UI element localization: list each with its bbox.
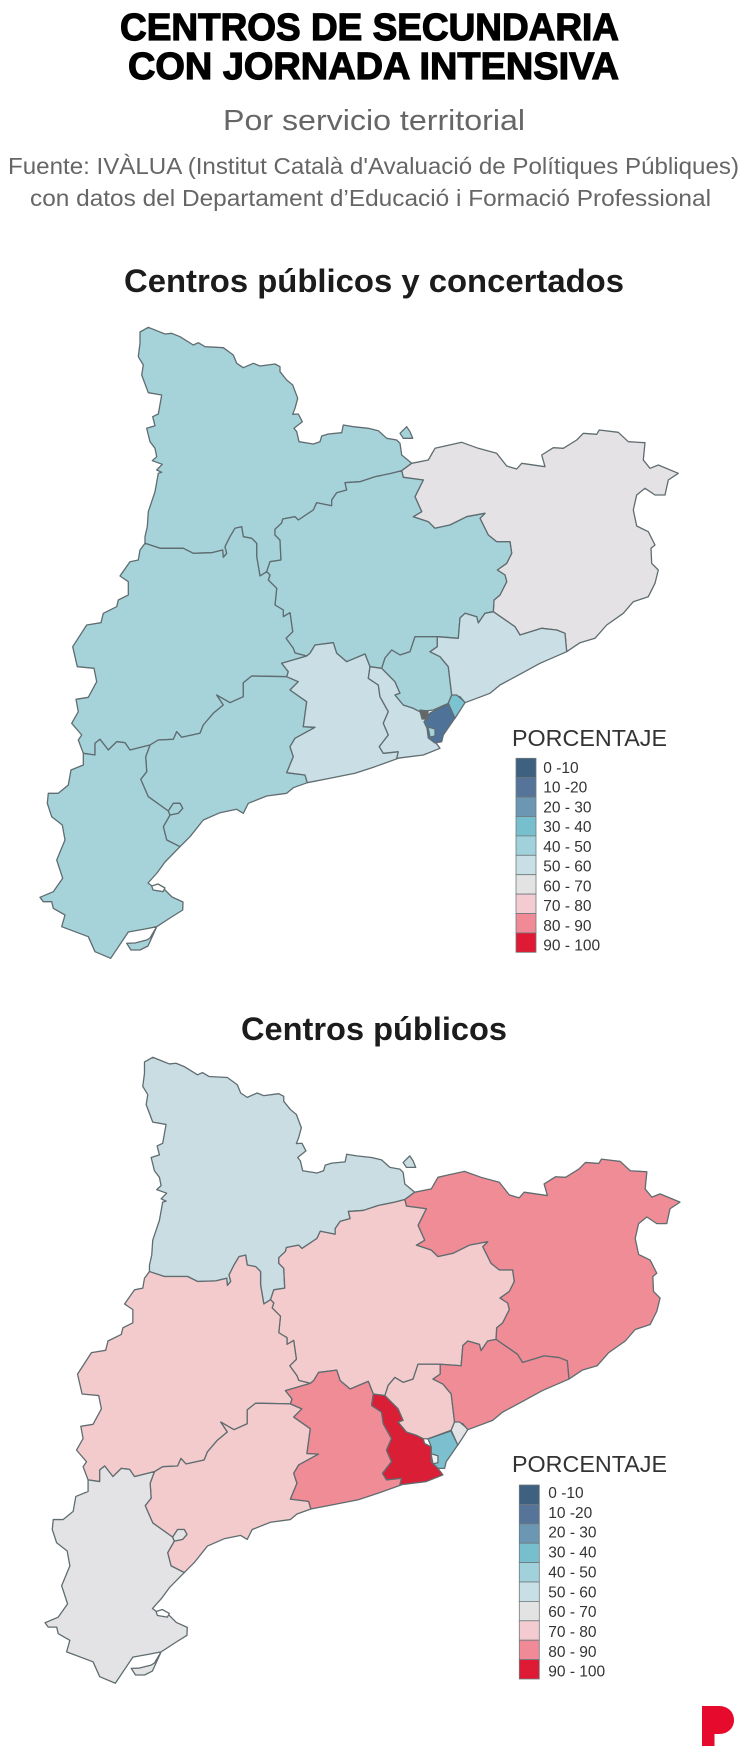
region: Fangar bay [152,884,165,892]
legend: map 1: 60 - 70 [543,878,592,895]
title: CENTROS DE SECUNDARIA [120,7,619,49]
map: centros públicos y concertados [40,327,678,958]
legend: map 2: PORCENTAJE [512,1451,667,1477]
legend: map 2: 50 - 60 [548,1584,597,1601]
region: Maresme sur [451,1422,468,1445]
region: Alt Pirineu i Aran [143,1057,415,1304]
region: Lleida [77,1255,310,1482]
legend: map 2: 20 - 30 [548,1525,597,1542]
map: centros públicos [45,1057,680,1683]
source note: Fuente: IVÀLUA (Institut Català d'Avaluació de Polítiques Públiques) [8,153,739,179]
legend: map 1: 80 - 90 [543,918,592,935]
region: Lleida [72,527,307,755]
region: enclave claro [428,727,435,737]
heading: centros públicos: Centros públicos [241,1011,507,1047]
legend: map 2 [512,1451,667,1681]
region: enclave Ebre loop [173,1529,187,1541]
region: Comarques Meridionals Baix Llobregat [368,667,440,758]
region: Maresme Vallès Oriental [430,612,567,703]
legend: map 1: 40 - 50 [543,839,592,856]
legend: map 2: 10 -20 [548,1505,593,1522]
region: Penedès [285,1370,401,1509]
region: Terres de l'Ebre [40,739,183,958]
legend: map 1: 10 -20 [543,780,588,797]
region: Llívia exclave [400,427,413,438]
region: Camp de Tarragona [141,676,315,847]
legend: map 1: 0 -10 [543,760,579,777]
region: Llívia exclave [403,1156,416,1167]
region: Catalunya Central [267,471,512,668]
legend: map 2: 40 - 50 [548,1564,597,1581]
legend: map 1: 90 - 100 [543,938,601,955]
region: Maresme sur [448,695,465,718]
legend: map 2: 70 - 80 [548,1624,597,1641]
legend: map 2: 0 -10 [548,1485,584,1502]
region: Alt Pirineu i Aran [138,327,412,576]
region: Vallès Occidental [382,637,452,712]
heading: centros públicos y concertados: Centros públicos y concertados [124,263,624,299]
region: Terres de l'Ebre [45,1466,187,1683]
legend: map 2: 30 - 40 [548,1545,597,1562]
region: Vallès Occidental [385,1364,455,1439]
region: Girona [405,1159,680,1379]
legend: map 1: 30 - 40 [543,819,592,836]
region: enclave oscuro [420,710,428,719]
title: CON JORNADA INTENSIVA [128,46,619,88]
legend: map 2: 60 - 70 [548,1604,597,1621]
legend: map 1: 20 - 30 [543,800,592,816]
source note [8,153,739,211]
subtitle: Por servicio territorial [223,105,525,137]
legend: map 1: 50 - 60 [543,859,592,876]
icon: logo P [702,1706,734,1746]
legend: map 1: PORCENTAJE [512,725,667,751]
legend: map 2: 90 - 100 [548,1664,606,1681]
region: Comarques Meridionals Baix Llobregat [372,1394,443,1485]
region: Maresme Vallès Oriental [433,1339,569,1430]
region: Barcelona ciudad [428,1431,458,1468]
legend: map 1: 70 - 80 [543,898,592,915]
legend: map 2: 80 - 90 [548,1644,597,1661]
region: Camp de Tarragona [145,1403,319,1573]
region: enclave Ebre loop [168,803,183,815]
region: Catalunya Central [271,1200,514,1396]
title [120,7,619,88]
region: enclave claro [431,1454,438,1464]
source note: con datos del Departament d’Educació i Formació Professional [30,185,711,211]
region: Fangar bay [156,1610,169,1617]
region: Penedès [282,643,398,783]
region: Barcelona ciudad [424,704,455,743]
legend: map 1 [512,725,667,955]
region: Girona [402,430,678,652]
